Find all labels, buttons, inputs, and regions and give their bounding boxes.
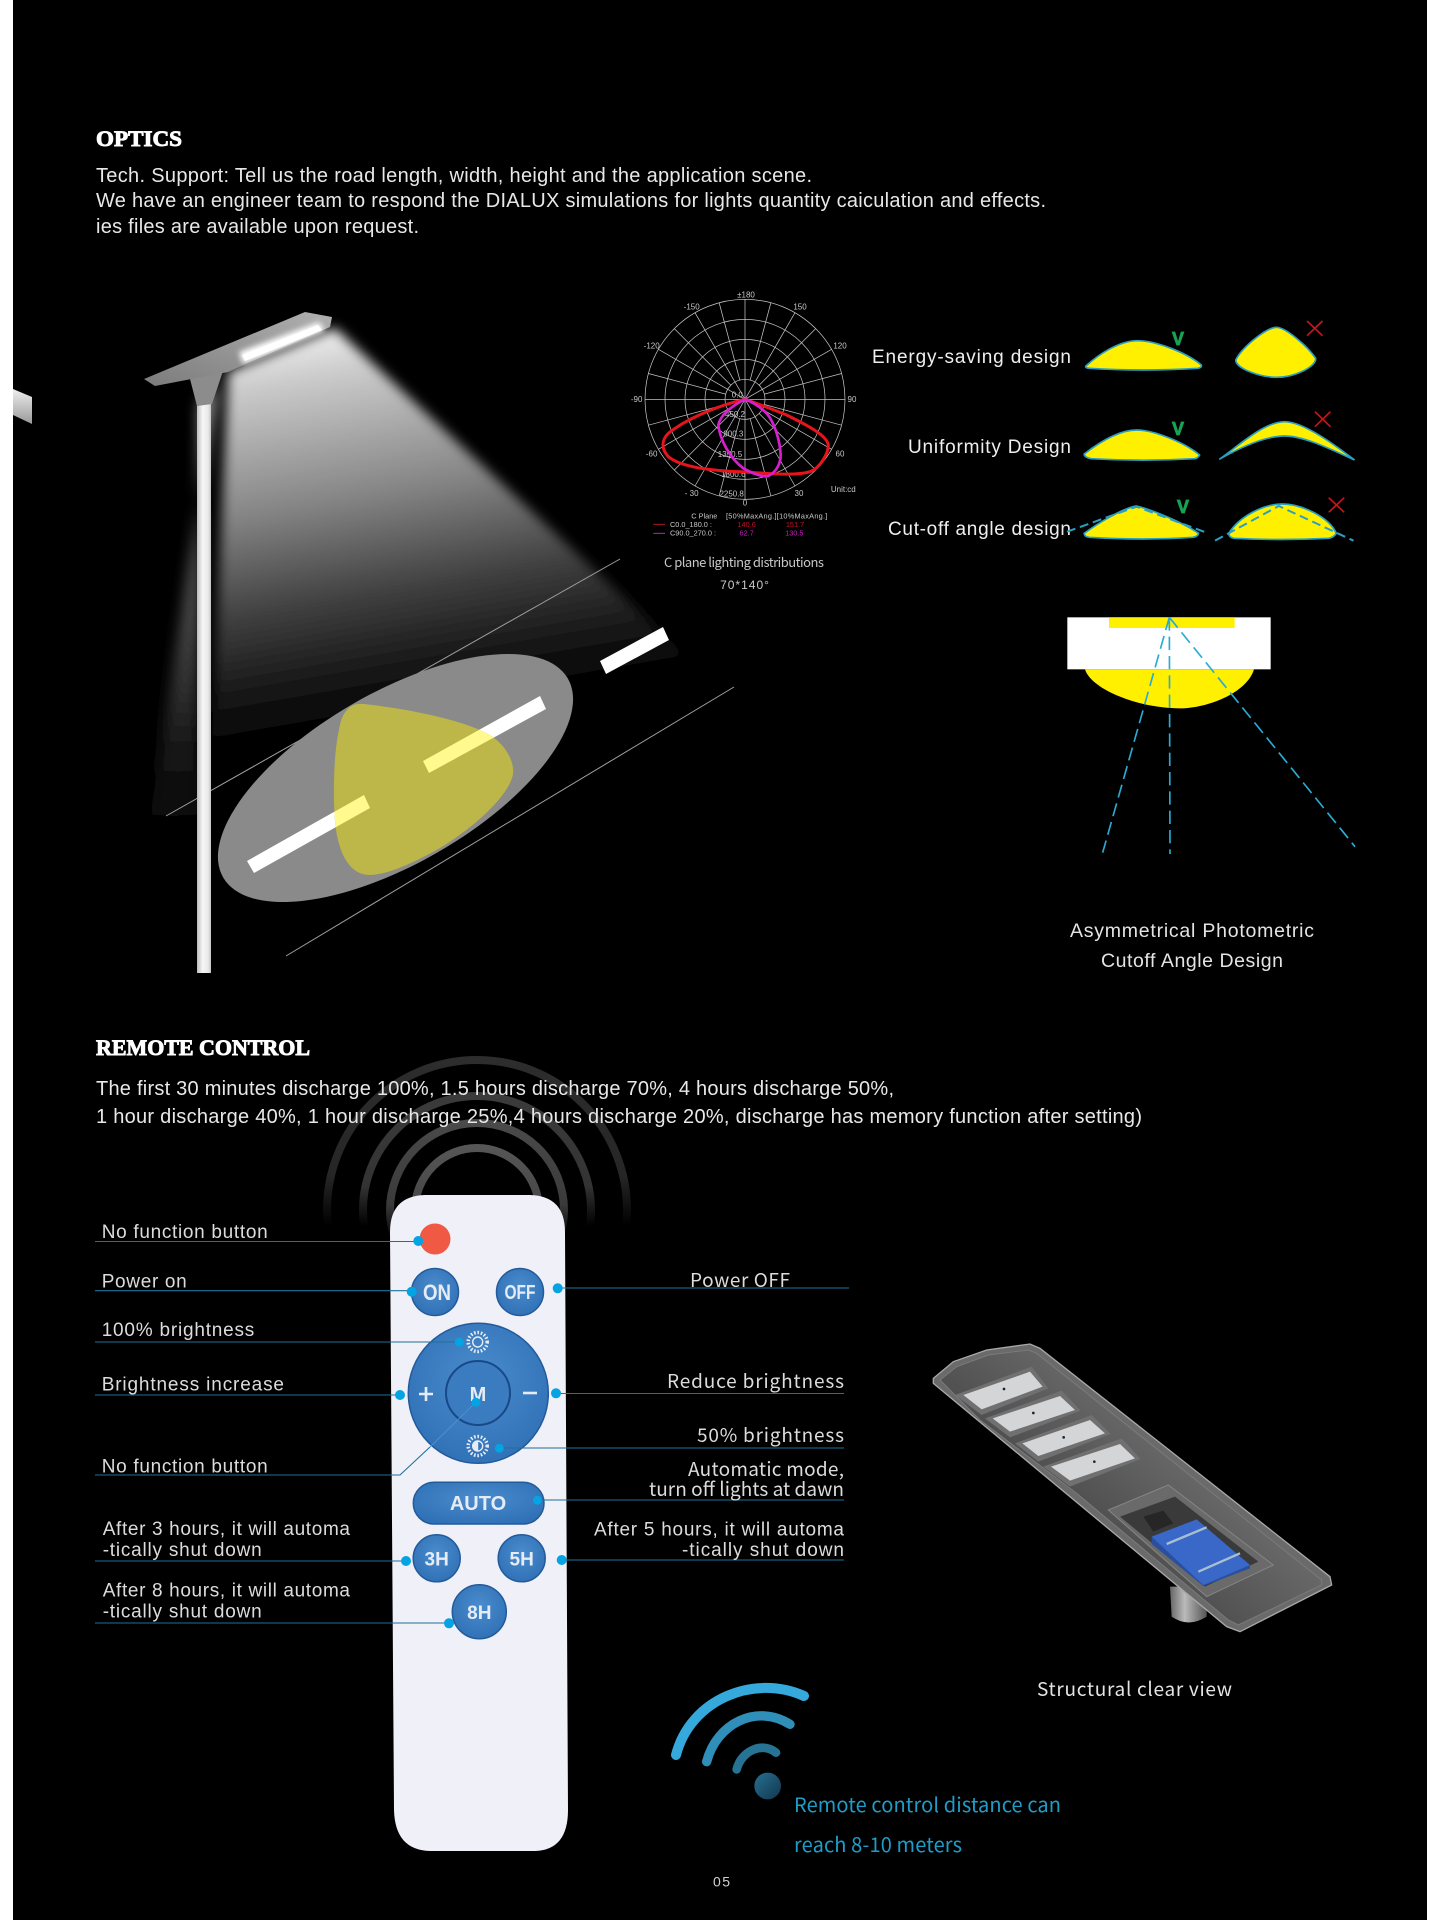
right button labels: After 5 hours, it will automa <box>594 1520 844 1540</box>
angle labels: 900.3 <box>723 430 744 439</box>
polar grid <box>645 299 845 499</box>
signal rings above remote <box>327 1060 627 1360</box>
caption: structural clear view: Structural clear view <box>1037 1675 1232 1702</box>
angle labels: 0 <box>743 498 748 507</box>
8H button: 8H <box>467 1603 491 1624</box>
angle labels: -150 <box>684 302 700 311</box>
red button <box>420 1224 450 1254</box>
angle labels: 1800.6 <box>721 470 746 479</box>
uniformity bad shape <box>1219 422 1355 460</box>
off button <box>496 1268 544 1316</box>
chart legend: [50%MaxAng.][10%MaxAng.] <box>726 512 827 521</box>
sun icon: half brightness <box>468 1436 487 1456</box>
angle labels: 450.2 <box>725 410 746 419</box>
red cross marks <box>1307 321 1344 512</box>
chart legend: 130.5 <box>785 529 804 538</box>
cut-off bad shape <box>1229 504 1336 539</box>
3H button: 3H <box>425 1550 449 1570</box>
page number: 05 <box>713 1874 730 1890</box>
text: remote control distance: reach 8-10 meters <box>794 1829 962 1858</box>
green check marks: V <box>1177 497 1189 517</box>
remote control <box>390 1195 568 1851</box>
energy-saving bad shape <box>1236 327 1316 377</box>
left button labels: After 8 hours, it will automa <box>103 1581 350 1602</box>
diagram: asymmetrical photometric cutoff <box>1067 617 1355 854</box>
red distribution curve <box>663 399 828 474</box>
angle labels: 1350.5 <box>718 450 743 459</box>
angle labels <box>631 291 857 507</box>
pole <box>197 404 211 973</box>
illustration: street light casting beam <box>13 312 734 973</box>
pole fragment at edge <box>13 389 32 424</box>
angle labels: 30 <box>795 489 804 498</box>
LED panel 2 <box>985 1391 1081 1437</box>
angle labels: -120 <box>644 342 660 351</box>
8H button <box>452 1585 506 1639</box>
brightness disc <box>408 1323 548 1463</box>
green check marks <box>1172 329 1189 517</box>
yellow light distribution <box>334 704 513 875</box>
caption: asymmetrical photometric <box>1070 920 1314 972</box>
illuminated ellipse <box>180 604 611 952</box>
design comparison labels: Energy-saving design <box>872 347 1071 368</box>
chart legend: 62.7 <box>740 529 754 538</box>
right button labels: Power OFF <box>690 1266 790 1293</box>
road markings under yellow <box>334 730 494 828</box>
right button labels <box>594 1266 844 1561</box>
yellow dome <box>1085 669 1254 708</box>
on button: ON <box>423 1280 451 1305</box>
on button <box>412 1268 458 1316</box>
right button labels: turn off lights at dawn <box>649 1475 844 1502</box>
left button labels: -tically shut down <box>103 1540 262 1561</box>
angle labels: - 30 <box>685 489 699 498</box>
caption: c plane lighting distributions: C plane lighting distributions <box>664 552 824 571</box>
angle labels: -60 <box>646 450 658 459</box>
auto button: AUTO <box>450 1493 506 1515</box>
text block: optics support: We have an engineer team to respond the DIALUX simulations for lights quantity caiculation and effects. <box>96 190 1046 212</box>
text block: discharge schedule: 1 hour discharge 40%, 1 hour discharge 25%,4 hours discharge 20%, discharge has memory function after setting) <box>96 1106 1142 1128</box>
design comparison shapes <box>1067 321 1355 541</box>
chart legend: C90.0_270.0 : <box>670 529 716 538</box>
chart legend: 151.7 <box>786 520 804 529</box>
angle labels: ±180 <box>737 291 755 300</box>
lamp LED panel <box>239 322 325 364</box>
auto button <box>413 1482 544 1524</box>
angle labels: 150 <box>793 302 807 311</box>
angle labels: -90 <box>631 395 643 404</box>
angle labels: 120 <box>833 342 847 351</box>
right button labels: 50% brightness <box>697 1421 844 1448</box>
design comparison labels: Cut-off angle design <box>888 519 1071 540</box>
road edge lines <box>166 559 734 956</box>
magenta distribution curve <box>718 399 781 476</box>
structural clear view of lamp <box>933 1344 1332 1632</box>
remote body <box>390 1195 568 1851</box>
chart legend: 140.6 <box>737 520 756 529</box>
sun icon: full brightness <box>468 1332 487 1352</box>
LED strip <box>1109 617 1235 628</box>
uniformity good shape <box>1084 430 1200 460</box>
lamp arm <box>190 368 224 406</box>
text block: discharge schedule: The first 30 minutes discharge 100%, 1.5 hours discharge 70%, 4 hours discharge 50%, <box>96 1078 894 1100</box>
cut-off dashed lines <box>1067 506 1354 541</box>
road markings <box>247 696 546 873</box>
left button labels: No function button <box>102 1222 268 1243</box>
5H button <box>498 1535 545 1582</box>
left button labels: After 3 hours, it will automa <box>103 1519 350 1540</box>
lamp housing inner floor <box>940 1350 1322 1625</box>
left button labels <box>102 1222 350 1623</box>
right button labels: Reduce brightness <box>667 1367 844 1394</box>
chart legend <box>653 512 827 538</box>
chart legend: C0.0_180.0 : <box>670 520 712 529</box>
angle labels: 60 <box>836 450 845 459</box>
LED panel 1 <box>955 1367 1048 1415</box>
lamp housing outer <box>933 1344 1332 1632</box>
off button: OFF <box>504 1282 536 1304</box>
fixture body <box>1067 617 1271 669</box>
heading: optics: OPTICS <box>96 126 182 151</box>
cut-off good shape <box>1084 506 1199 539</box>
energy-saving good shape <box>1086 341 1201 370</box>
controller <box>1143 1511 1173 1532</box>
angle labels: 0.0 <box>732 391 743 400</box>
text: remote control distance: Remote control distance can <box>794 1789 1061 1818</box>
LED panel 3 <box>1015 1415 1111 1462</box>
green check marks: V <box>1172 419 1184 439</box>
light beam <box>205 328 715 900</box>
caption: asymmetrical photometric: Asymmetrical Photometric <box>1070 920 1314 942</box>
angle labels: 90 <box>848 395 857 404</box>
left button labels: Power on <box>102 1272 187 1293</box>
angle labels: Unit:cd <box>831 485 856 494</box>
plus sign <box>419 1387 433 1401</box>
brightness disc: M <box>470 1384 486 1406</box>
caption: asymmetrical photometric: Cutoff Angle Design <box>1101 950 1283 972</box>
3H button <box>413 1535 460 1582</box>
mounting spigot <box>1170 1587 1207 1622</box>
minus sign <box>523 1392 537 1394</box>
callout lines and dots <box>95 1236 849 1628</box>
heading: remote control: REMOTE CONTROL <box>96 1035 310 1060</box>
cutoff dashed rays <box>1103 617 1355 854</box>
lamp head <box>144 312 332 386</box>
caption: beam angle: 70*140° <box>720 578 770 592</box>
polar light distribution chart <box>631 291 857 538</box>
chart legend: C Plane <box>691 512 717 521</box>
design comparison labels: Uniformity Design <box>908 437 1071 458</box>
left button labels: No function button <box>102 1457 268 1478</box>
green check marks: V <box>1172 329 1184 349</box>
left button labels: Brightness increase <box>102 1375 284 1396</box>
text block: optics support: ies files are available upon request. <box>96 216 419 238</box>
dashed road marking far <box>600 627 669 674</box>
battery compartment <box>1108 1485 1273 1597</box>
left button labels: 100% brightness <box>102 1320 254 1341</box>
battery cells <box>1152 1519 1250 1586</box>
5H button: 5H <box>510 1550 534 1570</box>
icon: wifi signal <box>676 1688 804 1799</box>
left button labels: -tically shut down <box>103 1602 262 1623</box>
design comparison labels <box>872 347 1071 540</box>
light glow left of pole <box>138 384 218 893</box>
LED panel 4 <box>1043 1438 1141 1487</box>
right button labels: Automatic mode, <box>688 1455 844 1482</box>
text block: optics support: Tech. Support: Tell us the road length, width, height and the application scene. <box>96 165 812 187</box>
text: remote control distance <box>794 1789 1061 1858</box>
angle labels: 2250.8 <box>719 490 744 499</box>
right button labels: -tically shut down <box>682 1540 844 1561</box>
text block: discharge schedule <box>96 1078 1142 1128</box>
text block: optics support <box>96 165 1046 238</box>
